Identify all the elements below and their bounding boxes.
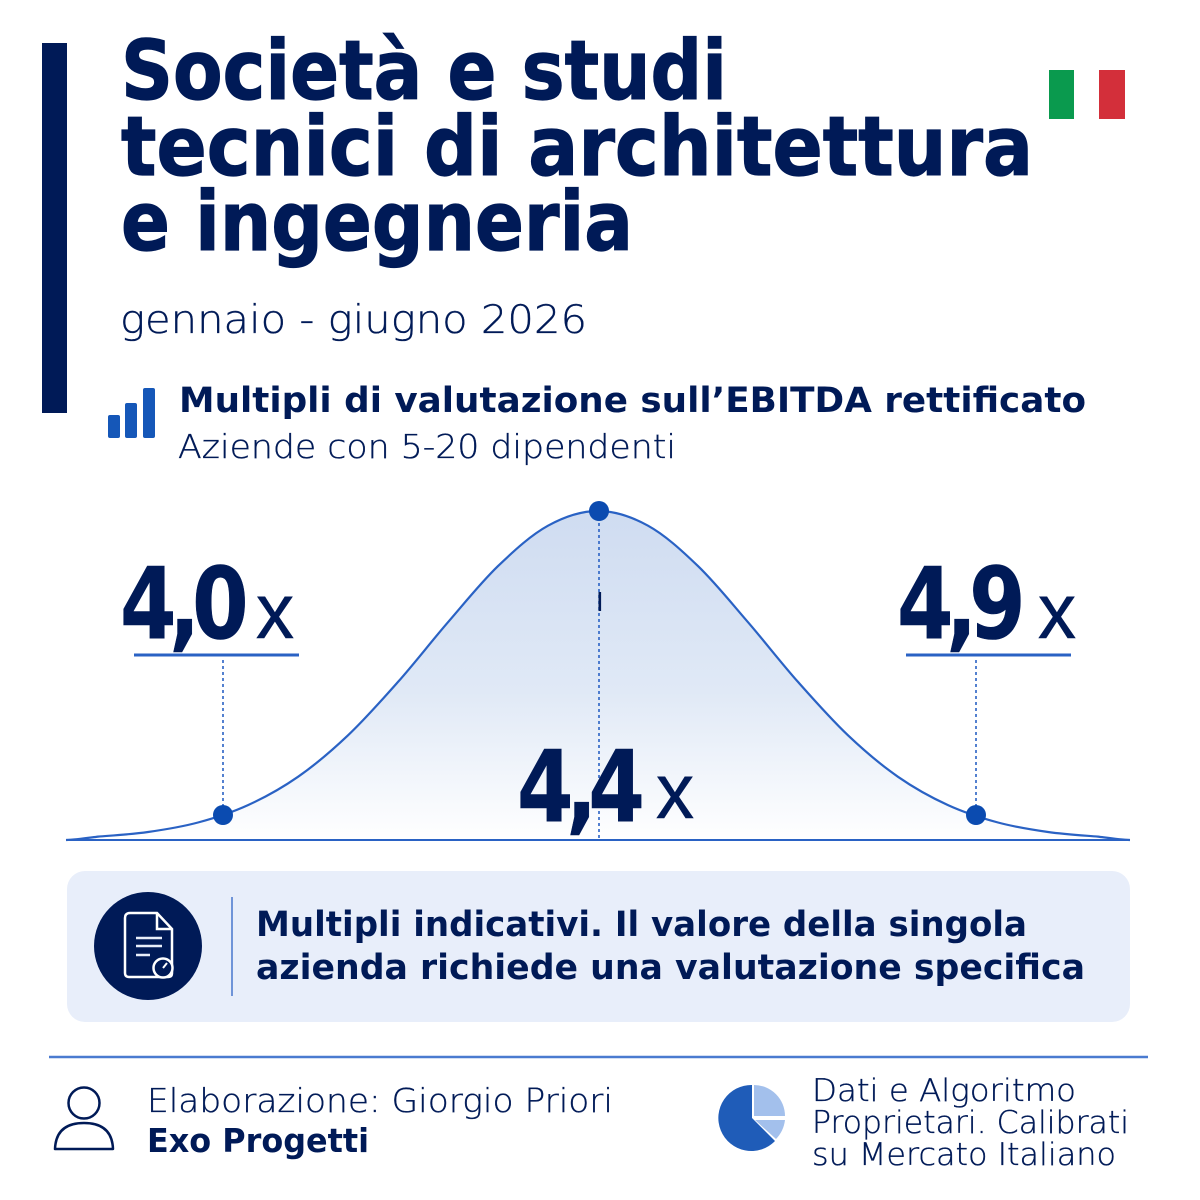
- section subheading: Aziende con 5-20 dipendenti: [178, 427, 676, 466]
- callout text: [256, 905, 1085, 988]
- icon: document: [94, 892, 202, 1000]
- high multiple value: 4,9: [897, 547, 1026, 662]
- median multiple value: 4,4: [517, 730, 645, 845]
- low multiple value: x: [256, 567, 294, 655]
- baseline axis: [67, 839, 1130, 841]
- left point: [213, 805, 233, 825]
- data source note: Proprietari. Calibrati: [812, 1105, 1129, 1141]
- icon: bar chart: [108, 388, 155, 438]
- icon: person: [55, 1088, 113, 1149]
- left dashed line: [222, 660, 224, 815]
- title: e ingegneria: [121, 175, 633, 270]
- chart: bell curve distribution: [66, 501, 1130, 845]
- title: [121, 24, 1033, 270]
- curve line: [66, 511, 1130, 840]
- icon: pie chart: [718, 1085, 785, 1151]
- low multiple value: 4,0: [120, 547, 249, 662]
- title: Società e studi: [121, 24, 727, 119]
- section heading: Multipli di valutazione sull’EBITDA rettificato: [179, 381, 1086, 421]
- author credit: Elaborazione: Giorgio Priori: [147, 1081, 613, 1120]
- right dashed line: [975, 660, 977, 815]
- median dashed line: [598, 511, 600, 840]
- peak point: [589, 501, 609, 521]
- callout text: azienda richiede una valutazione specifica: [256, 948, 1085, 988]
- data source note: su Mercato Italiano: [812, 1137, 1116, 1173]
- data source note: [812, 1073, 1129, 1173]
- right point: [966, 805, 986, 825]
- author credit: Exo Progetti: [147, 1121, 369, 1160]
- median multiple value: x: [656, 747, 694, 835]
- callout panel: [67, 871, 1130, 1022]
- curve fill: [66, 511, 1130, 840]
- high multiple value: x: [1038, 567, 1076, 655]
- callout text: Multipli indicativi. Il valore della singola: [256, 905, 1027, 945]
- icon: Italian flag: [1049, 70, 1125, 119]
- data source note: Dati e Algoritmo: [812, 1073, 1076, 1109]
- title: tecnici di architettura: [121, 100, 1033, 195]
- period subtitle: gennaio - giugno 2026: [120, 298, 587, 343]
- author credit: [147, 1081, 613, 1160]
- median tick mark: [598, 592, 601, 611]
- accent bar: [42, 43, 67, 413]
